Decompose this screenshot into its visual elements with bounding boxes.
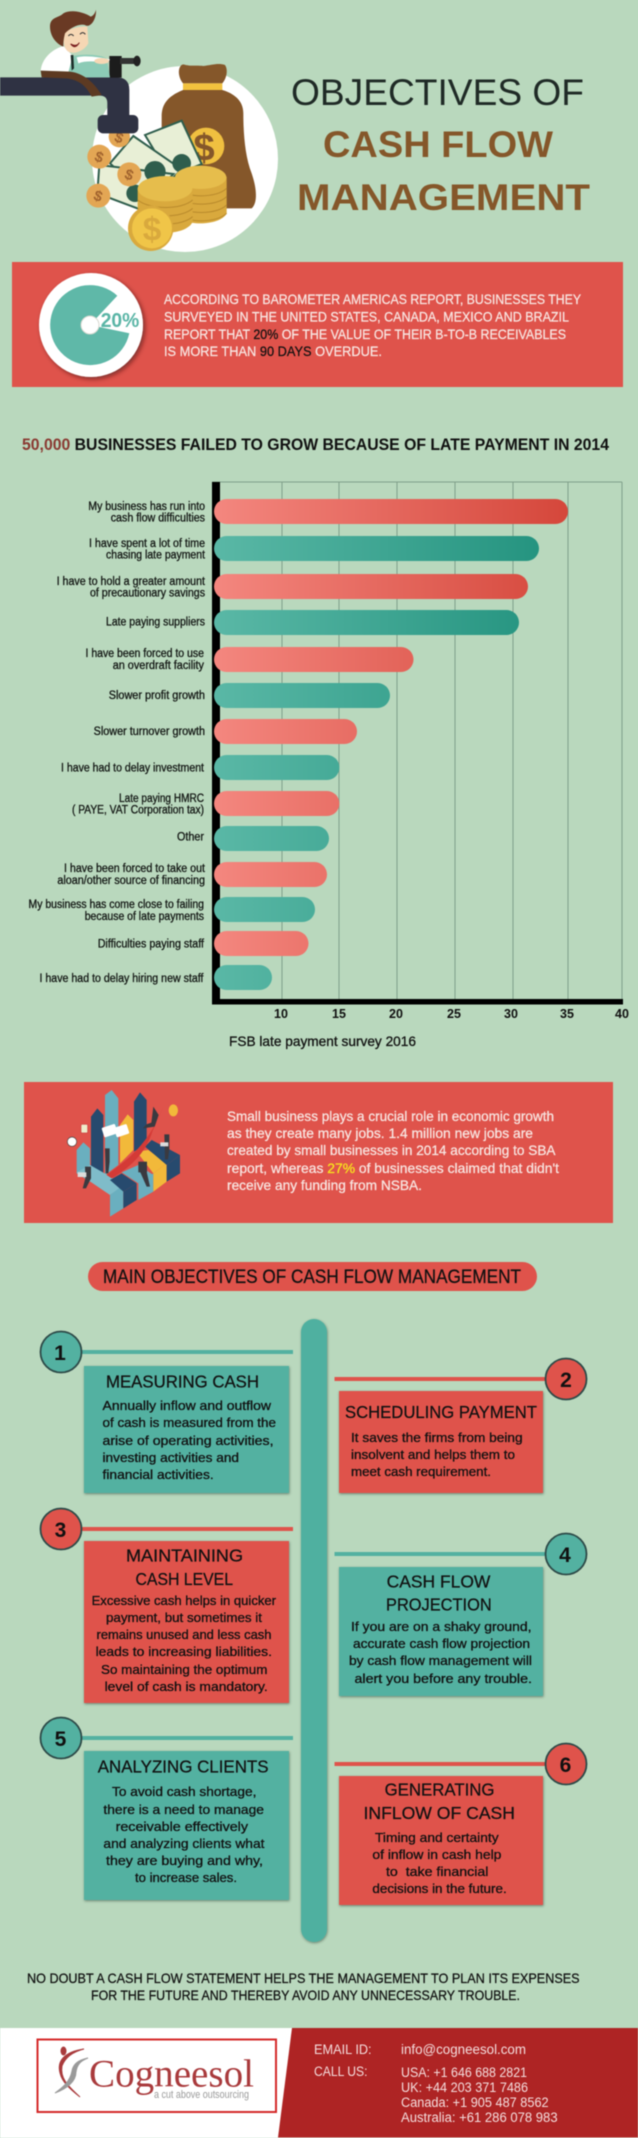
item 2: scheduling payment: SCHEDULING PAYMENT (345, 1402, 537, 1422)
contact details: Australia: +61 286 078 983 (401, 2110, 558, 2125)
title: OBJECTIVES OF (291, 71, 584, 113)
chart category labels (28, 501, 206, 985)
item 2: scheduling payment (334, 1358, 586, 1493)
chart category labels: Slower profit growth (109, 690, 205, 702)
item 1: measuring cash (40, 1332, 293, 1493)
item 4: cash flow projection: alert you before any trouble. (354, 1671, 532, 1686)
item 4: cash flow projection: PROJECTION (386, 1594, 492, 1614)
item 6: generating inflow of cash: to take financial (386, 1864, 489, 1879)
icon: small coins: $ (91, 188, 104, 206)
item 4: cash flow projection: accurate cash flow projection (353, 1636, 530, 1651)
number badge 6 (546, 1744, 586, 1784)
text block: report statistics: SURVEYED IN THE UNITED STATES, CANADA, MEXICO AND BRAZIL (164, 308, 569, 324)
chart axis values: 35 (560, 1007, 574, 1021)
contact details: CALL US: (314, 2064, 368, 2079)
text block: small business statistics: report, whereas 27% of businesses claimed that didn't (227, 1160, 559, 1176)
logo: Cogneesol: a cut above outsourcing (154, 2089, 249, 2101)
chart category labels: I have been forced to take out (64, 863, 206, 875)
chart axis values: 40 (615, 1007, 629, 1021)
number badge 3 (40, 1508, 82, 1550)
number badge 3: 3 (55, 1519, 66, 1542)
chart axis values: 25 (447, 1007, 461, 1021)
chart category labels: I have been forced to use (86, 648, 204, 660)
item 3: maintaining cash level: remains unused and less cash (96, 1627, 272, 1642)
chart axis values: 10 (274, 1007, 288, 1021)
title: CASH FLOW (323, 123, 554, 165)
heading pill: main objectives: MAIN OBJECTIVES OF CASH FLOW MANAGEMENT (103, 1267, 521, 1288)
item 1: measuring cash: MEASURING CASH (106, 1372, 259, 1392)
item 5: analyzing clients: receivable effectively (116, 1819, 249, 1834)
item 4: cash flow projection: CASH FLOW (387, 1572, 491, 1592)
chart category labels: Difficulties paying staff (98, 938, 205, 950)
text block: small business statistics (227, 1108, 559, 1193)
icon: man on the tap (41, 9, 141, 97)
illustration: man turning tap pouring money (0, 9, 278, 252)
item 2: scheduling payment: It saves the firms from being (351, 1430, 523, 1445)
icon: coin behind: $ (193, 127, 215, 170)
item 1: measuring cash: of cash is measured from the (102, 1415, 276, 1430)
item 4: cash flow projection: by cash flow management will (349, 1653, 532, 1668)
chart category labels: ( PAYE, VAT Corporation tax) (72, 804, 204, 816)
text block: small business statistics: receive any funding from NSBA. (227, 1177, 422, 1193)
icon: coin stacks: $ (143, 212, 162, 249)
chart category labels: of precautionary savings (90, 588, 205, 600)
icon: coin stacks (128, 166, 227, 251)
item 1: measuring cash: investing activities and (102, 1450, 239, 1465)
number badge 5 (40, 1718, 82, 1758)
item 5: analyzing clients: there is a need to manage (103, 1802, 264, 1817)
timeline spine (301, 1319, 327, 1942)
number badge 6: 6 (560, 1754, 571, 1777)
contact details: UK: +44 203 371 7486 (401, 2080, 528, 2095)
logo: Cogneesol (38, 2040, 276, 2112)
contact details: Canada: +1 905 487 8562 (401, 2095, 549, 2110)
item 5: analyzing clients (40, 1718, 293, 1900)
chart axis values (274, 1007, 629, 1021)
number badge 2 (546, 1358, 586, 1400)
item 6: generating inflow of cash: of inflow in cash help (372, 1847, 501, 1862)
number badge 1 (40, 1332, 82, 1372)
chart category labels: chasing late payment (106, 550, 206, 562)
icon: banknotes (97, 121, 202, 209)
item 2: scheduling payment: insolvent and helps them to (351, 1447, 515, 1462)
footer (0, 2028, 638, 2138)
item 4: cash flow projection (334, 1534, 586, 1696)
panel: small business (24, 1082, 613, 1223)
text block: small business statistics: as they create many jobs. 1.4 million new jobs are (227, 1125, 533, 1141)
item 5: analyzing clients: to increase sales. (135, 1870, 237, 1885)
chart category labels: Late paying HMRC (119, 793, 204, 805)
chart axis values: 15 (332, 1007, 346, 1021)
item 1: measuring cash: arise of operating activities, (102, 1433, 274, 1448)
icon: small coins: $ (122, 167, 135, 184)
chart source: FSB late payment survey 2016 (229, 1033, 416, 1049)
text block: small business statistics: Small business plays a crucial role in economic growth (227, 1108, 554, 1124)
number badge 4 (546, 1534, 586, 1574)
chart category labels: cash flow difficulties (111, 512, 205, 524)
icon: small coins: $ (112, 130, 125, 147)
chart category labels: because of late payments (85, 911, 204, 923)
chart category labels: an overdraft facility (113, 660, 204, 672)
panel: barometer report (12, 262, 623, 387)
item 5: analyzing clients: ANALYZING CLIENTS (98, 1756, 269, 1776)
item 3: maintaining cash level (40, 1508, 293, 1703)
chart category labels: My business has come close to failing (28, 899, 204, 911)
icon: 20% pie (39, 273, 143, 377)
text block: report statistics: ACCORDING TO BAROMETER AMERICAS REPORT, BUSINESSES THEY (164, 291, 582, 307)
item 2: scheduling payment: meet cash requirement. (351, 1464, 491, 1479)
number badge 1: 1 (54, 1342, 66, 1365)
closing statement (27, 1970, 580, 2003)
chart axis values: 20 (389, 1007, 403, 1021)
text block: report statistics: REPORT THAT 20% OF THE VALUE OF THEIR B-TO-B RECEIVABLES (164, 326, 566, 342)
item 6: generating inflow of cash: INFLOW OF CASH (364, 1803, 515, 1823)
item 4: cash flow projection: If you are on a shaky ground, (351, 1619, 532, 1634)
chart category labels: I have had to delay investment (61, 762, 205, 774)
item 5: analyzing clients: and analyzing clients what (103, 1836, 265, 1851)
chart category labels: aloan/other source of financing (57, 875, 205, 887)
number badge 4: 4 (559, 1544, 571, 1567)
chart category labels: I have had to delay hiring new staff (40, 973, 204, 985)
title: MANAGEMENT (297, 176, 590, 218)
icon: small coins (86, 126, 141, 208)
item 3: maintaining cash level: CASH LEVEL (136, 1569, 233, 1589)
item 1: measuring cash: financial activities. (102, 1467, 214, 1482)
icon: small coins: $ (92, 149, 105, 167)
heading pill: main objectives (88, 1262, 537, 1291)
text block: report statistics: IS MORE THAN 90 DAYS OVERDUE. (164, 343, 382, 359)
chart category labels: Late paying suppliers (106, 616, 205, 628)
item 6: generating inflow of cash: decisions in the future. (372, 1881, 507, 1896)
contact details: info@cogneesol.com (401, 2042, 526, 2057)
item 3: maintaining cash level: So maintaining the optimum (101, 1662, 267, 1677)
item 3: maintaining cash level: Excessive cash helps in quicker (92, 1593, 277, 1608)
icon: 20% pie: 20% (101, 309, 139, 332)
item 3: maintaining cash level: MAINTAINING (126, 1546, 243, 1566)
item 5: analyzing clients: To avoid cash shortage, (112, 1784, 256, 1799)
item 5: analyzing clients: they are buying and why, (106, 1853, 263, 1868)
text block: report statistics (164, 291, 582, 359)
illustration: isometric growth chart with people (67, 1090, 180, 1217)
item 6: generating inflow of cash: GENERATING (385, 1780, 494, 1800)
chart category labels: My business has run into (88, 501, 205, 513)
bar chart (28, 482, 629, 1021)
chart category labels: I have to hold a greater amount (57, 576, 206, 588)
item 1: measuring cash: Annually inflow and outflow (102, 1398, 272, 1413)
item 6: generating inflow of cash (334, 1744, 586, 1905)
heading: chart: 50,000 BUSINESSES FAILED TO GROW BECAUSE OF LATE PAYMENT IN 2014 (22, 436, 610, 454)
title (291, 71, 590, 218)
number badge 5: 5 (55, 1728, 67, 1751)
number badge 2: 2 (560, 1369, 572, 1392)
chart category labels: Slower turnover growth (94, 726, 205, 738)
item 3: maintaining cash level: level of cash is mandatory. (105, 1679, 268, 1694)
item 3: maintaining cash level: leads to increasing liabilities. (96, 1644, 272, 1659)
contact details (314, 2042, 558, 2125)
item 3: maintaining cash level: payment, but sometimes it (106, 1610, 262, 1625)
logo: Cogneesol: Cogneesol (89, 2052, 254, 2096)
chart category labels: I have spent a lot of time (89, 538, 205, 550)
icon: money bag (162, 64, 256, 208)
icon: tap pipe (0, 77, 138, 133)
contact details: USA: +1 646 688 2821 (401, 2065, 527, 2080)
closing statement: FOR THE FUTURE AND THEREBY AVOID ANY UNNECESSARY TROUBLE. (91, 1987, 520, 2003)
closing statement: NO DOUBT A CASH FLOW STATEMENT HELPS THE MANAGEMENT TO PLAN ITS EXPENSES (27, 1970, 580, 1986)
chart category labels: Other (177, 832, 204, 844)
text block: small business statistics: created by small businesses in 2014 according to SBA (227, 1142, 556, 1158)
icon: coin behind (188, 127, 224, 170)
chart axis values: 30 (504, 1007, 518, 1021)
item 6: generating inflow of cash: Timing and certainty (375, 1830, 499, 1845)
contact details: EMAIL ID: (314, 2042, 372, 2057)
